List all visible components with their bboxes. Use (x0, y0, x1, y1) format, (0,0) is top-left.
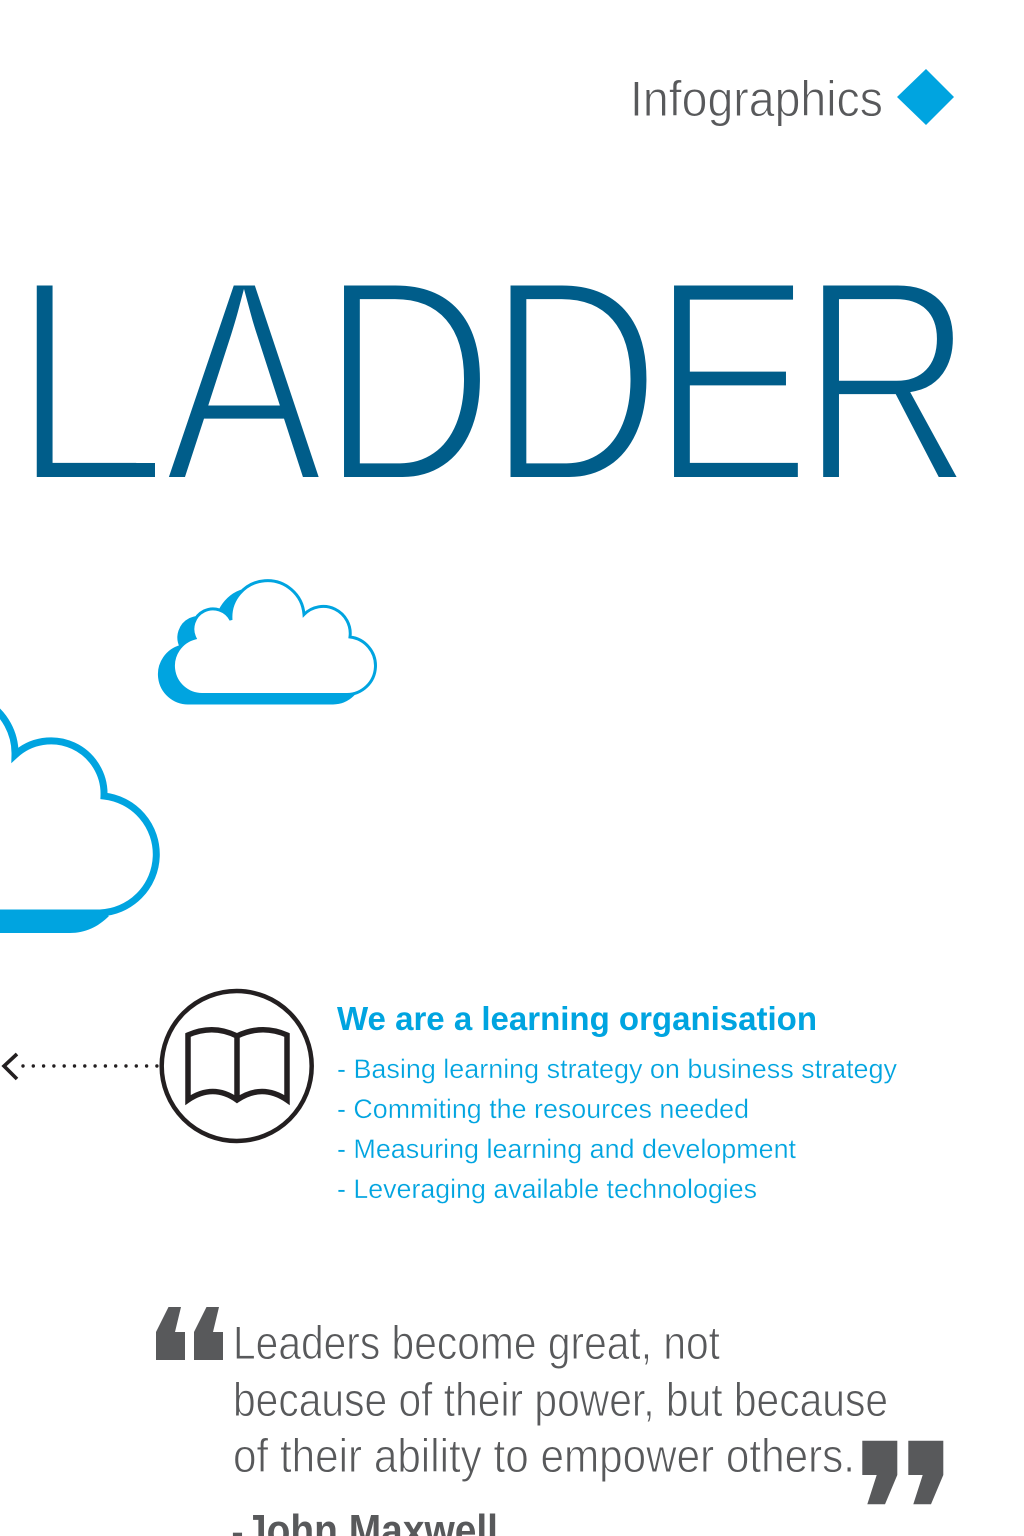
quote text (233, 1316, 888, 1482)
quote text: because of their power, but because (233, 1373, 888, 1426)
title: D (321, 220, 495, 543)
icon: open book in circle (162, 991, 312, 1141)
title: A (164, 220, 325, 543)
header label (630, 69, 954, 127)
bullet list: - Leveraging available technologies (337, 1174, 757, 1204)
title: L (14, 220, 148, 543)
title: R (800, 220, 974, 543)
bullet list (337, 1054, 897, 1204)
text block: learning organisation (337, 1000, 897, 1204)
header text: Infographics (630, 71, 883, 127)
title: D (487, 220, 661, 543)
quote (156, 1307, 943, 1536)
icon: small cloud (159, 581, 375, 703)
bullet list: - Commiting the resources needed (337, 1094, 749, 1124)
bullet list: - Basing learning strategy on business strategy (337, 1054, 897, 1084)
icon: blue diamond (897, 69, 954, 125)
heading: We are a learning organisation (337, 1000, 817, 1037)
icon: opening quote marks (156, 1307, 223, 1360)
bullet list: - Measuring learning and development (337, 1134, 796, 1164)
dotted arrow pointing left (4, 1054, 160, 1079)
quote text: of their ability to empower others. (233, 1429, 855, 1482)
title (14, 220, 974, 543)
icon: large cloud (0, 702, 156, 933)
quote text: Leaders become great, not (233, 1316, 720, 1369)
icon: closing quote marks (862, 1441, 943, 1504)
title: E (651, 220, 812, 543)
